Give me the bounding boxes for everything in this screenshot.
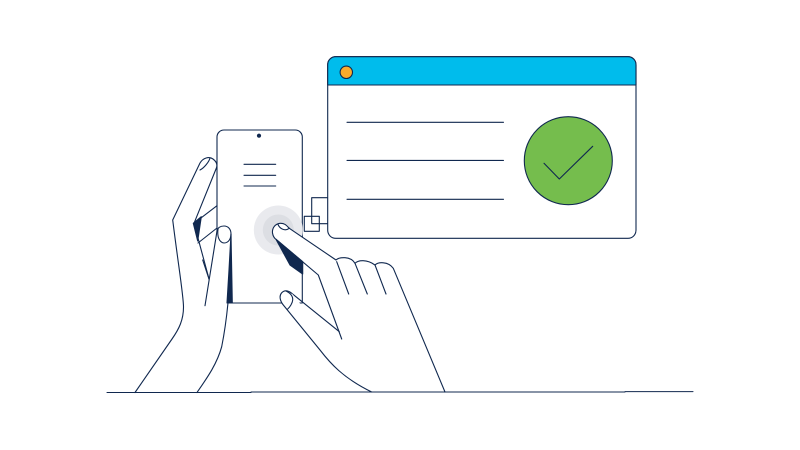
index finger shadow (276, 239, 303, 274)
phone camera (257, 134, 261, 138)
text lines (347, 122, 504, 199)
fingernail (200, 158, 210, 170)
finger creases (194, 206, 217, 280)
green check badge (524, 117, 612, 205)
index finger fill (272, 223, 345, 290)
thumbnail (218, 229, 231, 243)
phone body (217, 130, 302, 303)
right hand (272, 223, 445, 392)
index finger (289, 228, 445, 392)
thumb (292, 293, 339, 332)
thumb (197, 226, 231, 392)
index fingernail (278, 224, 289, 230)
smartphone (217, 130, 303, 303)
thumbnail (286, 291, 293, 309)
connector squares (304, 198, 328, 231)
window button: orange (340, 66, 352, 79)
touch ripple (254, 206, 303, 254)
window title bar (328, 57, 636, 85)
shadow between fingers (193, 217, 201, 241)
browser window (328, 57, 636, 238)
phone text lines (244, 164, 276, 186)
window body (328, 57, 636, 238)
ground line (107, 391, 693, 394)
hand outline and finger (135, 158, 217, 392)
left hand (135, 158, 232, 392)
thumb shadow (227, 234, 232, 303)
knuckle lines (337, 262, 386, 294)
